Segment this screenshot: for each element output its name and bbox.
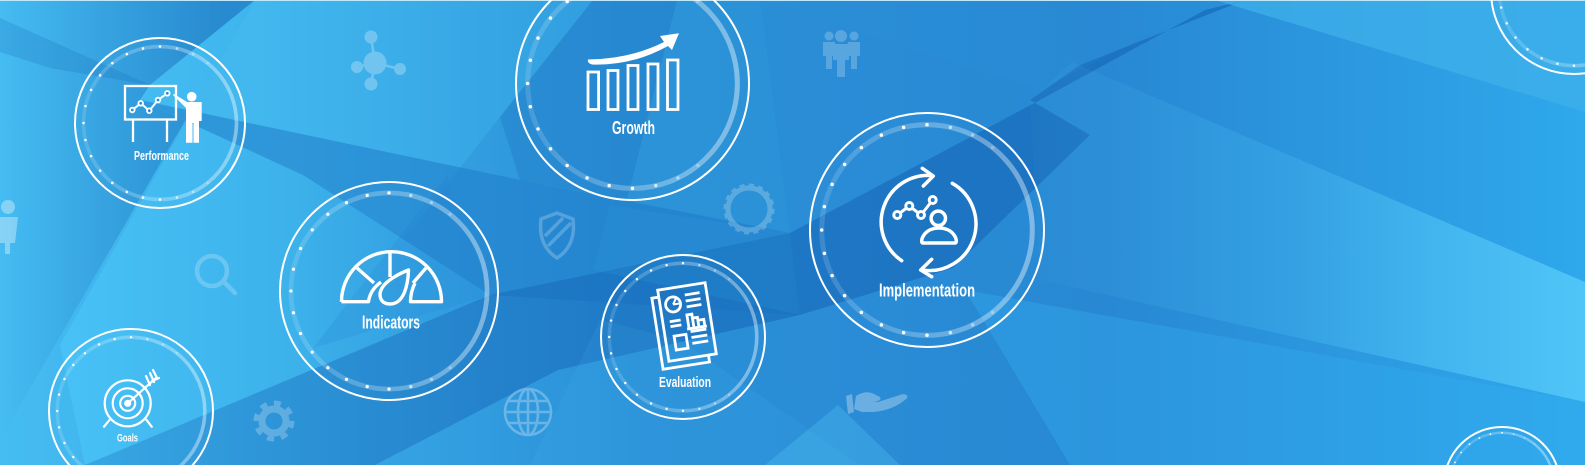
ghost icon: person — [0, 200, 18, 254]
label: Goals: Goals — [117, 433, 138, 445]
icon: cycle with chart and person — [881, 168, 976, 277]
circle: Growth — [516, 0, 749, 200]
icon: gauge — [342, 252, 442, 304]
icon: target and arrow — [104, 370, 159, 427]
circle: bottom right corner — [1444, 427, 1560, 465]
ghost icon: globe — [505, 389, 551, 435]
circle: Implementation — [810, 113, 1044, 347]
ghost icon: people — [823, 30, 860, 77]
label: Indicators: Indicators — [362, 312, 420, 332]
ghost icon: gear large — [725, 185, 773, 233]
label: Evaluation: Evaluation — [659, 374, 711, 391]
circle: top right corner — [1491, 0, 1585, 74]
label: Implementation: Implementation — [879, 281, 975, 301]
circle: Performance — [75, 38, 245, 208]
icon: report document — [651, 283, 717, 369]
circle: Indicators — [280, 182, 498, 400]
circle: Goals — [49, 329, 213, 465]
label: Performance: Performance — [134, 148, 189, 163]
ghost icon: gear small — [256, 403, 292, 439]
ghost icon: shield — [541, 213, 573, 258]
circle: Evaluation — [601, 255, 765, 419]
icon: bars with rising arrow — [588, 33, 679, 109]
label: Growth: Growth — [612, 118, 655, 138]
ghost icon: hand — [846, 392, 907, 414]
ghost icon: magnifier — [197, 256, 235, 293]
ghost icon: network — [351, 30, 406, 90]
icon: presenter with chart — [125, 86, 202, 143]
